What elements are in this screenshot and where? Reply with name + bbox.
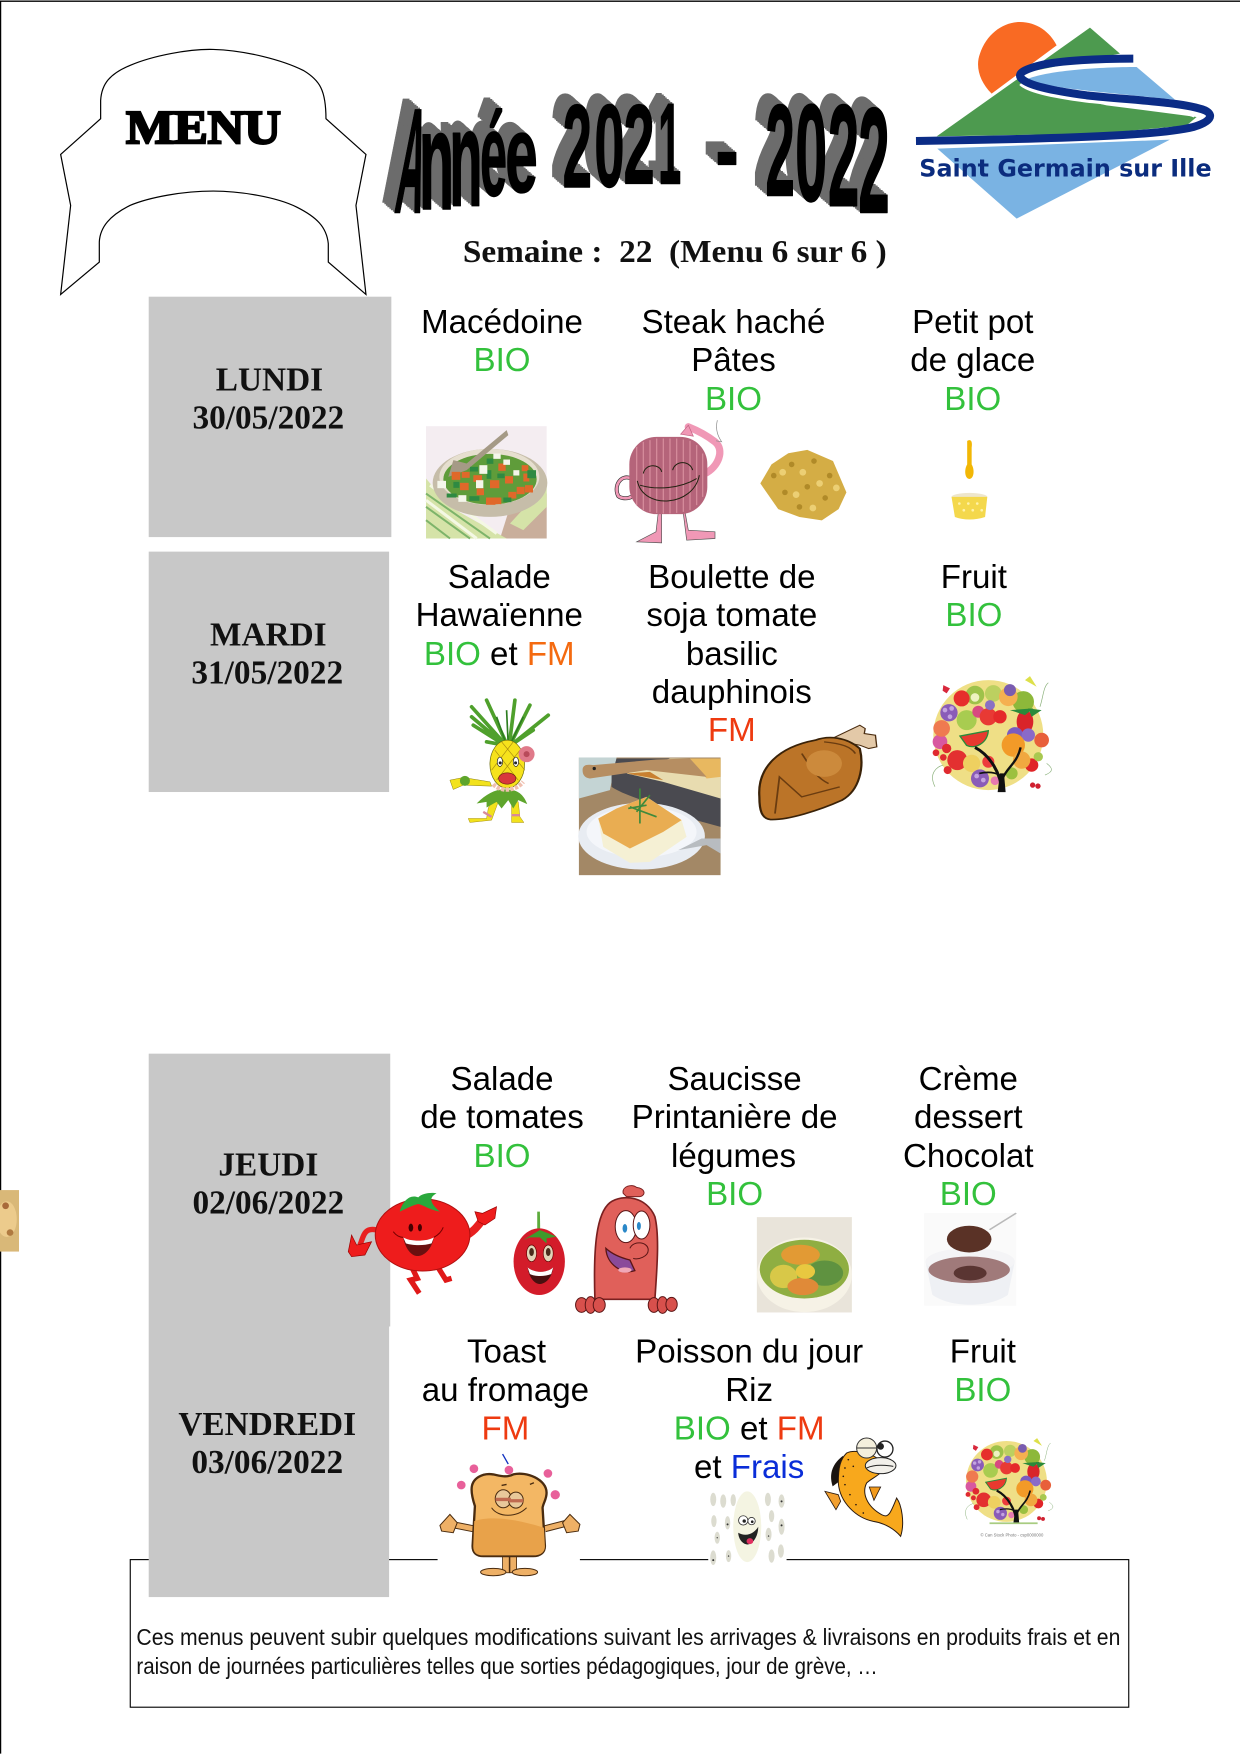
vendredi main text: Riz <box>725 1372 773 1409</box>
icon: fruit tree <box>933 676 1051 792</box>
icon: roast chicken <box>759 725 877 820</box>
vendredi dessert text <box>950 1334 1016 1409</box>
jeudi dessert text: Chocolat <box>903 1138 1034 1175</box>
title: Année 2021 - 2022: - <box>715 94 739 206</box>
jeudi starter text <box>420 1061 584 1175</box>
icon: fish character <box>825 1438 903 1536</box>
title: Année 2021 - 2022: e <box>505 94 538 216</box>
footer note box: Ces menus peuvent subir quelques modifications suivant les arrivages & livraisons en produits frais et en <box>136 1624 1120 1650</box>
icon: tomato character <box>348 1193 497 1293</box>
mardi starter text <box>416 559 583 673</box>
panel: vendredi <box>149 1326 389 1597</box>
lundi dessert text: BIO <box>944 381 1001 418</box>
icon: rice grain character <box>708 1489 787 1569</box>
mardi dessert text <box>941 559 1007 634</box>
title: Année 2021 - 2022: n <box>449 83 482 236</box>
jeudi main text <box>632 1061 838 1213</box>
icon: toast character <box>438 1449 580 1586</box>
mardi starter text: Hawaïenne <box>416 597 583 634</box>
mardi main text: dauphinois <box>652 674 812 711</box>
icon: ice cream pot <box>952 440 987 519</box>
vendredi dessert text: BIO <box>954 1372 1011 1409</box>
vendredi dessert text: Fruit <box>950 1334 1016 1371</box>
lundi dessert text: Petit pot <box>912 304 1033 341</box>
title: Année 2021 - 2022: 2 <box>563 81 592 213</box>
title: Année 2021 - 2022: 2 <box>858 77 890 244</box>
mardi starter text: BIO et FM <box>424 636 575 673</box>
panel: lundi <box>149 297 391 537</box>
logo text: Saint Germain sur Ille <box>919 154 1212 182</box>
panel: vendredi: VENDREDI <box>178 1406 356 1443</box>
vendredi starter text: FM <box>482 1411 529 1448</box>
jeudi starter text: Salade <box>451 1061 554 1098</box>
panel: mardi <box>149 552 389 792</box>
mardi dessert text: Fruit <box>941 559 1007 596</box>
panel: lundi: LUNDI <box>216 362 323 399</box>
vendredi main text: BIO et FM <box>674 1411 825 1448</box>
icon: gratin photo <box>578 757 721 875</box>
jeudi starter text: de tomates <box>420 1099 584 1136</box>
panel: jeudi: 02/06/2022 <box>192 1185 344 1222</box>
lundi main text: Steak haché <box>642 304 825 341</box>
jeudi dessert text <box>903 1061 1034 1213</box>
lundi dessert text: de glace <box>910 342 1035 379</box>
menu banner <box>61 49 366 294</box>
icon: vegetable plate <box>757 1217 852 1312</box>
title: Année 2021 - 2022: 0 <box>594 82 625 212</box>
panel: mardi: 31/05/2022 <box>191 655 343 692</box>
mardi main text: soja tomate <box>646 597 817 634</box>
icon: small fruit tree <box>965 1438 1053 1538</box>
vendredi starter text: au fromage <box>422 1372 589 1409</box>
icon: pasta <box>760 450 846 520</box>
panel: mardi: MARDI <box>210 617 327 654</box>
lundi starter text: Macédoine <box>421 304 583 341</box>
menu label: MENU <box>126 103 281 155</box>
panel: vendredi: 03/06/2022 <box>191 1444 343 1481</box>
title: Année 2021 - 2022: 0 <box>795 77 827 231</box>
vendredi main text: et Frais <box>694 1449 804 1486</box>
panel: lundi: 30/05/2022 <box>192 400 344 437</box>
vendredi starter text: Toast <box>467 1334 546 1371</box>
title: Année 2021 - 2022: é <box>480 89 507 222</box>
title: Année 2021 - 2022: A <box>390 79 435 245</box>
vendredi main text <box>635 1334 863 1486</box>
lundi main text: Pâtes <box>691 342 776 379</box>
logo: Saint Germain sur Ille <box>916 22 1212 219</box>
jeudi main text: BIO <box>706 1176 763 1213</box>
title: Année 2021 - 2022 <box>390 76 890 245</box>
title: Année 2021 - 2022: 2 <box>828 76 859 237</box>
image fragment at left edge <box>0 1190 19 1252</box>
panel: jeudi <box>149 1054 390 1326</box>
icon: macedoine bowl <box>426 426 547 539</box>
lundi dessert text <box>910 304 1035 418</box>
stock photo caption: © Can Stock Photo - csp0000000 <box>980 1533 1044 1538</box>
icon: chocolate cream <box>924 1213 1016 1306</box>
lundi starter text <box>421 304 583 379</box>
jeudi main text: Saucisse <box>667 1061 802 1098</box>
vendredi main text: Poisson du jour <box>635 1334 863 1371</box>
title: Année 2021 - 2022: 2 <box>765 79 795 224</box>
jeudi dessert text: dessert <box>914 1099 1023 1136</box>
jeudi main text: légumes <box>671 1138 796 1175</box>
footer note box <box>130 1560 1129 1707</box>
lundi main text: BIO <box>705 381 762 418</box>
vendredi starter text <box>422 1334 589 1448</box>
title: Année 2021 - 2022: n <box>419 82 454 239</box>
icon: pineapple character <box>450 700 548 822</box>
mardi main text <box>646 559 817 749</box>
icon: steak character <box>617 420 722 543</box>
jeudi starter text: BIO <box>474 1138 531 1175</box>
icon: small tomato <box>514 1212 565 1295</box>
mardi main text: basilic <box>686 636 778 673</box>
jeudi main text: Printanière de <box>632 1099 838 1136</box>
footer note box: raison de journées particulières telles que sorties pédagogiques, jour de grève, … <box>136 1653 878 1679</box>
jeudi dessert text: Crème <box>919 1061 1018 1098</box>
icon: sausage character <box>576 1186 677 1313</box>
panel: jeudi: JEUDI <box>218 1147 318 1184</box>
title: Année 2021 - 2022: 2 <box>623 81 655 208</box>
lundi main text <box>642 304 825 418</box>
jeudi dessert text: BIO <box>940 1176 997 1213</box>
mardi main text: Boulette de <box>648 559 816 596</box>
mardi starter text: Salade <box>448 559 551 596</box>
title: Année 2021 - 2022: 1 <box>658 81 681 209</box>
week line: Semaine : 22 (Menu 6 sur 6 ) <box>463 234 887 269</box>
lundi starter text: BIO <box>474 342 531 379</box>
mardi dessert text: BIO <box>945 597 1002 634</box>
mardi main text: FM <box>708 712 756 749</box>
